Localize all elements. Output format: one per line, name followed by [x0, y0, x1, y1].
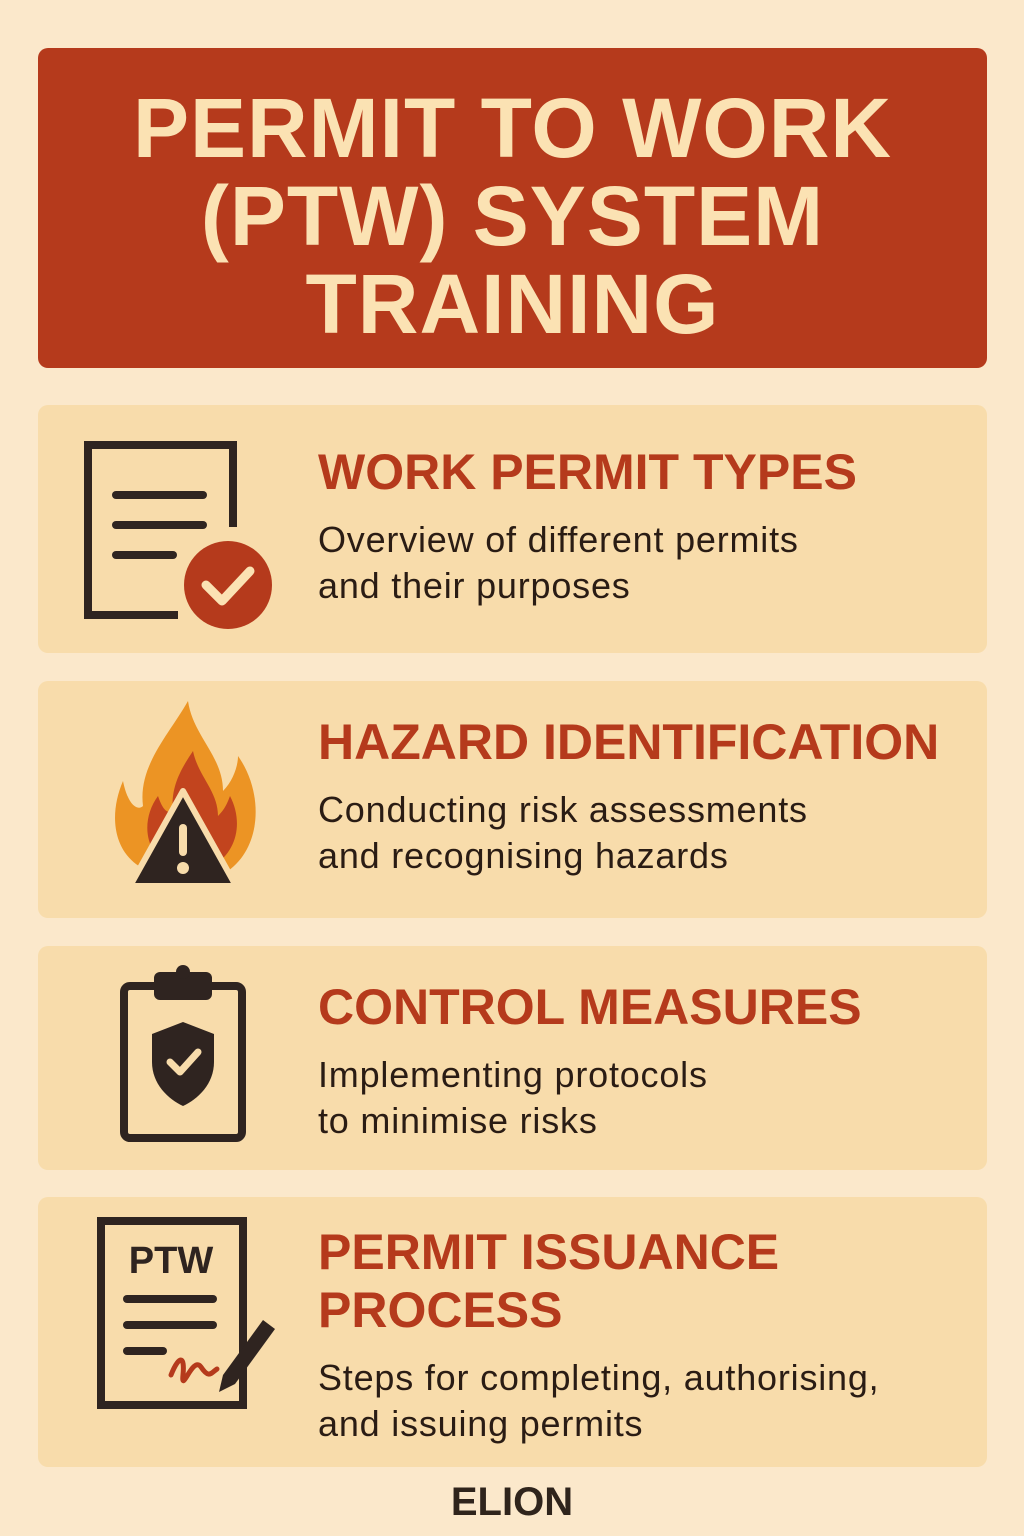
title — [38, 48, 987, 368]
panel: hazard identification — [38, 681, 987, 918]
text — [318, 519, 799, 606]
text: Implementing protocols — [318, 1054, 708, 1095]
text — [318, 1054, 708, 1141]
icon: fire with warning — [115, 701, 256, 883]
panel: permit issuance process — [38, 1197, 987, 1467]
heading: HAZARD IDENTIFICATION — [318, 714, 939, 770]
icon: clipboard with shield — [120, 965, 246, 1142]
heading: PERMIT ISSUANCE — [318, 1224, 779, 1280]
icon: PTW form with pen — [97, 1217, 275, 1409]
heading: CONTROL MEASURES — [318, 979, 862, 1035]
text: and issuing permits — [318, 1403, 643, 1444]
text: and recognising hazards — [318, 835, 729, 876]
panel: control measures — [38, 946, 987, 1170]
title: PERMIT TO WORK — [133, 81, 892, 175]
text: Overview of different permits — [318, 519, 799, 560]
heading: PROCESS — [318, 1282, 563, 1338]
heading: WORK PERMIT TYPES — [318, 444, 857, 500]
text — [318, 789, 808, 876]
text — [318, 1357, 880, 1444]
panel: work permit types — [38, 405, 987, 653]
text: Conducting risk assessments — [318, 789, 808, 830]
heading — [318, 1224, 779, 1338]
text: to minimise risks — [318, 1100, 598, 1141]
title: TRAINING — [306, 257, 719, 351]
text: Steps for completing, authorising, — [318, 1357, 880, 1398]
icon: document with check — [84, 441, 272, 629]
title: (PTW) SYSTEM — [201, 169, 824, 263]
icon: PTW form with pen: PTW — [129, 1240, 213, 1282]
text: and their purposes — [318, 565, 631, 606]
footer brand: ELION — [451, 1480, 573, 1524]
